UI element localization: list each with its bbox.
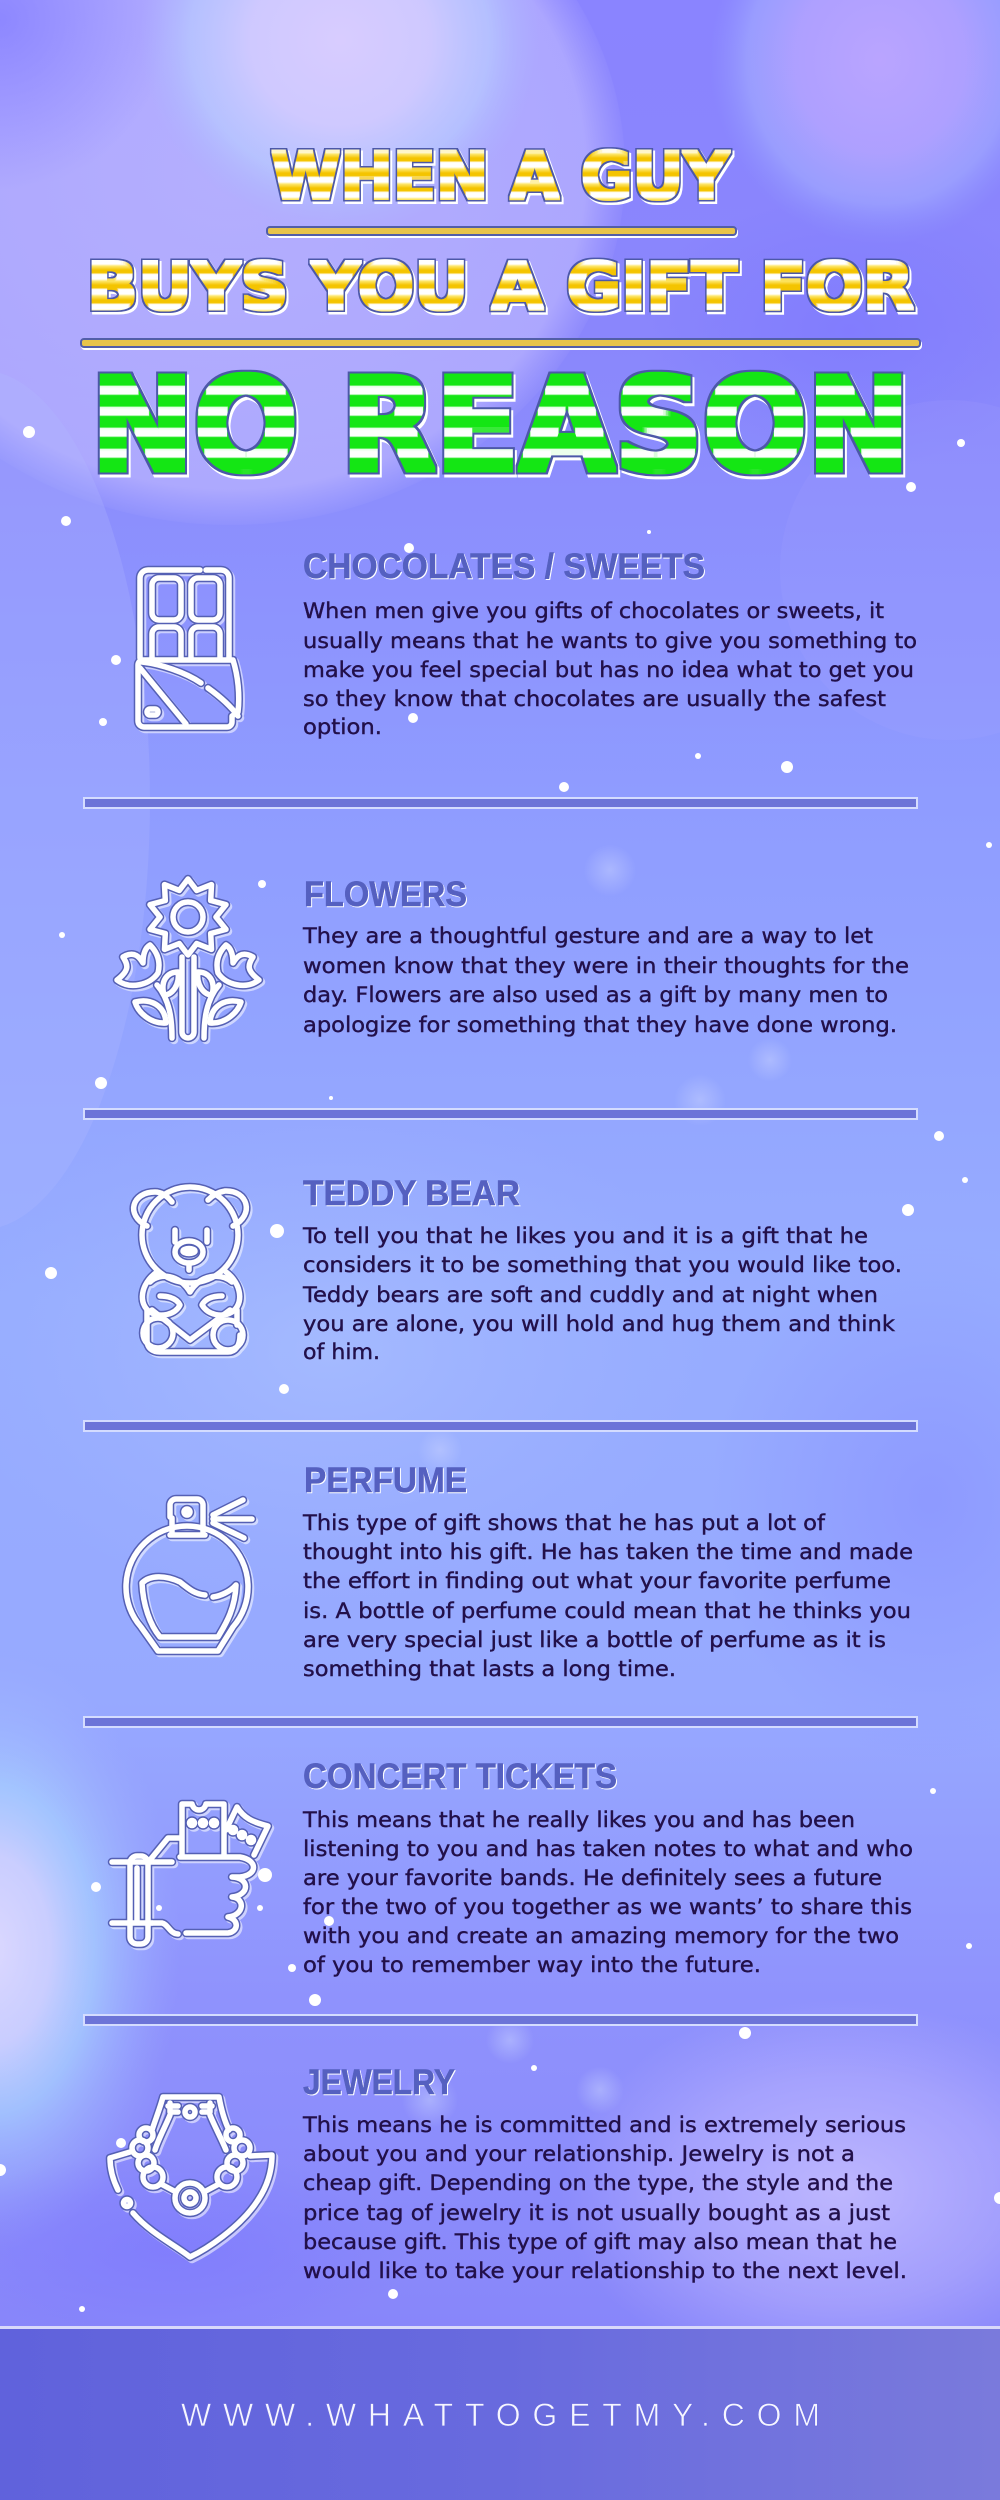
- text: teddy bear: of him.: [303, 1340, 380, 1364]
- panel: teddy bear: [134, 1174, 902, 1364]
- title rule 2: [81, 339, 920, 347]
- text: perfume: are very special just like a bottle of perfume as it is: [303, 1628, 886, 1652]
- panel: flowers: [117, 875, 909, 1038]
- text: perfume: This type of gift shows that he has put a lot of: [302, 1511, 826, 1535]
- icon: flowers: [117, 879, 259, 1038]
- text: flowers: They are a thoughtful gesture and are a way to let: [302, 924, 873, 948]
- panel: perfume: [126, 1461, 913, 1681]
- text: concert tickets: for the two of you together as we wants’ to share this: [303, 1895, 912, 1919]
- text: concert tickets: [302, 1808, 913, 1977]
- text: teddy bear: To tell you that he likes you and it is a gift that he: [302, 1224, 868, 1248]
- panel: concert tickets: [112, 1757, 913, 1977]
- heading: chocolates: CHOCOLATES / SWEETS: [303, 547, 705, 586]
- text: chocolates: [303, 599, 917, 739]
- heading: teddy bear: TEDDY BEAR: [303, 1174, 520, 1213]
- text: jewelry: would like to take your relationship to the next level.: [303, 2259, 907, 2283]
- footer url: WWW.WHATTOGETMY.COM: [181, 2397, 820, 2433]
- text: perfume: the effort in finding out what your favorite perfume: [303, 1569, 891, 1593]
- text: chocolates: When men give you gifts of chocolates or sweets, it: [303, 599, 884, 623]
- heading: perfume: PERFUME: [304, 1461, 467, 1500]
- text: flowers: apologize for something that they have done wrong.: [303, 1013, 897, 1037]
- title rule 1: [267, 227, 736, 235]
- text: teddy bear: you are alone, you will hold and hug them and think: [303, 1312, 896, 1336]
- icon: hand with tickets: [112, 1804, 268, 1944]
- text: jewelry: about you and your relationship. Jewelry is not a: [303, 2142, 855, 2166]
- title line: buys you a gift for: BUYS YOU A GIFT FOR: [87, 250, 914, 325]
- text: chocolates: make you feel special but has no idea what to get you: [303, 658, 914, 682]
- divider 4: [84, 1717, 917, 1727]
- divider 2: [84, 1109, 917, 1119]
- text: perfume: is. A bottle of perfume could mean that he thinks you: [303, 1599, 911, 1623]
- text: flowers: women know that they were in their thoughts for the: [303, 954, 909, 978]
- text: teddy bear: Teddy bears are soft and cuddly and at night when: [302, 1283, 878, 1307]
- divider 1: [84, 798, 917, 808]
- icon: perfume bottle: [126, 1499, 252, 1651]
- heading: flowers: FLOWERS: [304, 875, 467, 914]
- text: concert tickets: listening to you and has taken notes to what and who: [303, 1837, 913, 1861]
- title line: when a guy: WHEN A GUY: [271, 140, 730, 214]
- text: concert tickets: of you to remember way into the future.: [303, 1953, 761, 1977]
- snow dots: [0, 426, 1000, 2312]
- title: [81, 140, 920, 501]
- text: jewelry: This means he is committed and is extremely serious: [302, 2113, 906, 2137]
- divider 5: [84, 2015, 917, 2025]
- icon: necklace: [110, 2097, 272, 2257]
- panel: chocolates: [138, 547, 917, 739]
- text: jewelry: because gift. This type of gift may also mean that he: [303, 2230, 897, 2254]
- text: perfume: [302, 1511, 913, 1681]
- text: chocolates: usually means that he wants to give you something to: [303, 629, 917, 653]
- text: flowers: day. Flowers are also used as a gift by many men to: [303, 983, 888, 1007]
- icon: chocolate bar: [138, 570, 239, 727]
- text: teddy bear: [302, 1224, 902, 1364]
- title line: no reason: NO REASON: [91, 351, 910, 501]
- text: flowers: [302, 924, 909, 1037]
- text: perfume: something that lasts a long time.: [303, 1657, 676, 1681]
- text: concert tickets: are your favorite bands. He definitely sees a future: [303, 1866, 882, 1890]
- text: jewelry: price tag of jewelry it is not usually bought as a just: [303, 2201, 890, 2225]
- text: perfume: thought into his gift. He has taken the time and made: [303, 1540, 913, 1564]
- text: chocolates: option.: [303, 715, 382, 739]
- divider 3: [84, 1421, 917, 1431]
- text: teddy bear: considers it to be something that you would like too.: [303, 1253, 902, 1277]
- text: jewelry: [302, 2113, 907, 2283]
- icon: teddy bear: [134, 1187, 246, 1352]
- heading: concert tickets: CONCERT TICKETS: [303, 1757, 617, 1796]
- panel: jewelry: [110, 2063, 907, 2283]
- text: chocolates: so they know that chocolates are usually the safest: [303, 687, 886, 711]
- heading: jewelry: JEWELRY: [303, 2063, 455, 2102]
- text: jewelry: cheap gift. Depending on the type, the style and the: [303, 2171, 893, 2195]
- text: concert tickets: This means that he really likes you and has been: [302, 1808, 855, 1832]
- text: concert tickets: with you and create an amazing memory for the two: [303, 1924, 899, 1948]
